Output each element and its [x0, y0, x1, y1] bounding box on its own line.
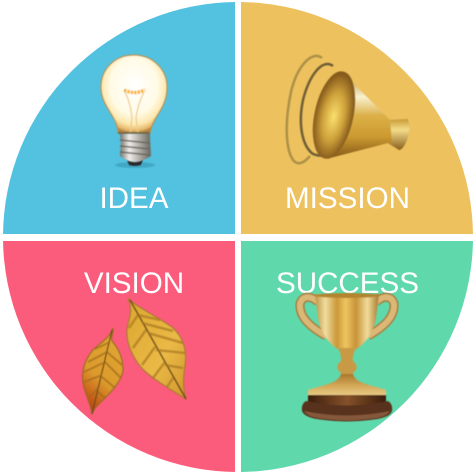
label: IDEA: IDEA — [99, 182, 169, 215]
mouth — [306, 68, 362, 162]
panel: mission quadrant — [241, 2, 473, 234]
label: MISSION: MISSION — [285, 182, 410, 215]
stem — [337, 348, 357, 376]
big leaf — [127, 298, 186, 399]
foot — [308, 374, 386, 398]
handles — [300, 297, 394, 336]
base plate — [302, 401, 392, 422]
plinth — [308, 395, 386, 408]
icon: light bulb — [101, 55, 167, 168]
sound waves — [287, 56, 333, 163]
horn end — [386, 119, 409, 150]
cup — [315, 294, 379, 352]
panel: success quadrant — [241, 241, 473, 472]
icon: megaphone — [287, 56, 409, 163]
icon: trophy — [300, 293, 394, 422]
label: VISION: VISION — [84, 267, 184, 300]
icon: autumn leaves — [83, 298, 186, 414]
panel: idea quadrant — [3, 2, 235, 234]
cone — [330, 73, 392, 158]
small leaf — [83, 328, 123, 414]
panel: vision quadrant — [3, 241, 235, 472]
label: SUCCESS: SUCCESS — [276, 267, 419, 300]
